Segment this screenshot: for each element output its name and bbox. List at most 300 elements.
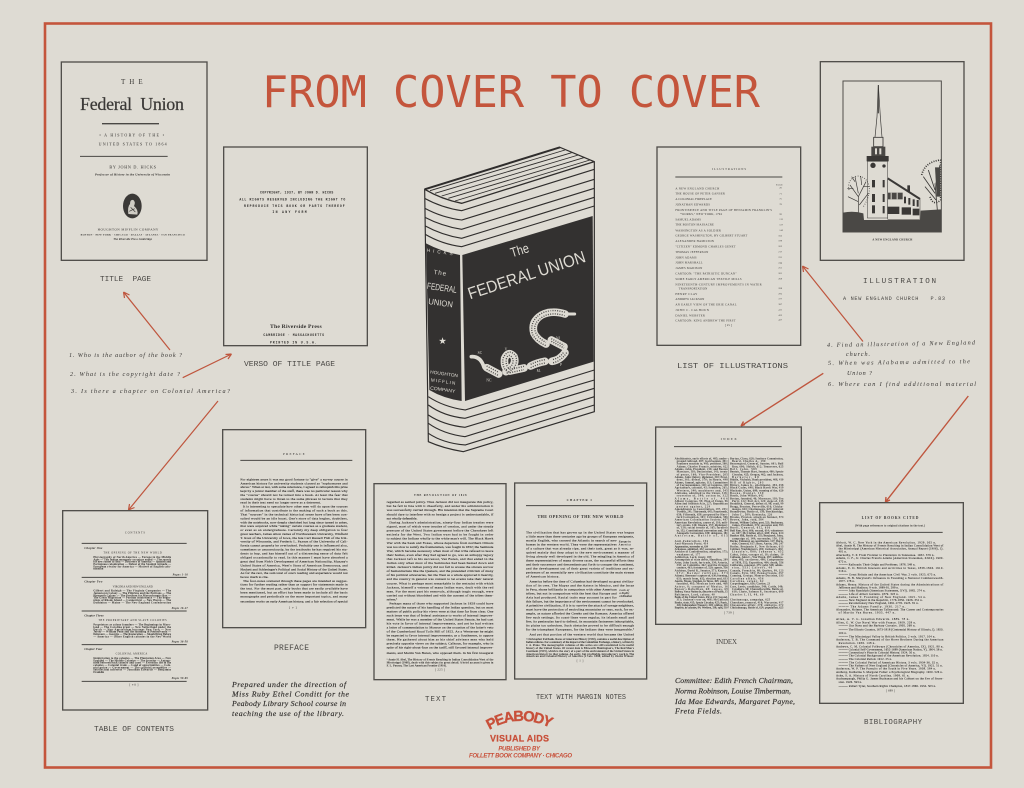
index column two: at, 607; McClellan after, 608; Pope, 614 (732, 532, 784, 535)
questions 4 to 6: 6. Where can I find additional material (828, 381, 976, 388)
preface body text: United States of America, West's Story of American Democracy, and (240, 563, 348, 568)
foot-note (387, 658, 494, 667)
body text: pressure of the United States government before the Cherokees left (387, 529, 493, 533)
index column two: Cabot, John, voyages of, 18; claims, 19 (730, 553, 784, 556)
icon: join or die snake (471, 309, 575, 382)
questions 1 to 3 (69, 352, 231, 395)
index column one: Appomattox, surrender at, 634 (675, 545, 709, 548)
spine panel (426, 243, 462, 401)
body text with side notes: America before the time of Columbus had developed no great civiliza- (529, 579, 635, 583)
index column two: Burke, Edmund, on conciliation, 127; Burn- (730, 540, 783, 543)
panel: title page: HOUGHTON MIFFLIN COMPANY (98, 227, 159, 231)
foot-note: F. L. Paxson, The Last American Frontier (1910). (387, 664, 447, 667)
panel: illustration page (820, 62, 964, 260)
citation list: Anthony, Katharine S. Margaret Fuller: a Psychological Biography. 1920. 526 n. (836, 670, 943, 675)
note: prepared under direction: Miss Ruby Ethel Conditt for the (231, 690, 350, 698)
index column two: Charles I, II, 40, 60 (730, 593, 764, 596)
body text with side notes: and the development out of their great variety of traditions and ex- (526, 566, 635, 570)
list entries: CARTOON: KING ANDREW THE FIRST (675, 319, 736, 323)
preface body text: Hockett and Schlesinger's Political and Social History of the United States. (240, 567, 348, 571)
citation list: Adams, Henry. History of the United States during the Administrations of (836, 582, 943, 587)
index column one: weakness of, 177 (677, 553, 701, 556)
index column two: Bell, John, 589 (730, 468, 757, 471)
arrow: question 4 to illustration list (802, 266, 863, 342)
panel: text with margin notes: CHAPTER I (567, 498, 592, 502)
publisher imprint: Peabody Visual Aids (469, 710, 572, 759)
index column one: 572; Border ruffians, 573 (677, 572, 728, 575)
index column one: of Correspondence, 120; at Congress, 128 (677, 484, 728, 487)
preface body text: As for the rest, the sum total of one's reading and experience would not (240, 571, 348, 576)
label: title page: TITLE PAGE (100, 276, 152, 284)
body text with side notes: America (618, 543, 631, 546)
panel: index: INDEX (721, 437, 737, 441)
spine title: UNION (428, 296, 454, 309)
panel: illustration page: A NEW ENGLAND CHURCH (872, 238, 913, 241)
foot-note: American and Colonial History of America (2 vols. 1888, edited by Justin Winsor. (526, 655, 634, 658)
panel: index: [ 739 ] (724, 611, 734, 615)
body text: War, which became necessary when most of that tribe refused to leave (387, 549, 494, 554)
preface body text: sometimes or unconsciously, by the textbooks he has required his stu- (240, 548, 348, 553)
index column one: 426; Independent Treasury, 428; wildcat, 416 (677, 604, 728, 607)
citation list: ——— Railroads: Their Origin and Problems. 1878. 548 n. (838, 563, 916, 567)
index column two: Bunker Hill, Battle of, 135; Burgoyne, John, (730, 535, 784, 538)
index column two: Party, 122; Port Act, 124; siege of, 135 (732, 500, 784, 503)
spine title: HOUGHTON (430, 369, 458, 378)
body text: be expected to favor internal improvements; as a Southerner, to oppose (387, 634, 494, 639)
panel: verso of title page: COPYRIGHT, 1937, BY JOHN D. HICKS (260, 191, 333, 195)
index column two: Blockade, Union, 608; running of the, 620 (730, 489, 784, 492)
citation list: Adams, C. F., Jr. Charles Francis Adams (American Statesmen, XXIX). 1900. (836, 556, 944, 561)
preface body text: great teachers, James Alton James of Northwestern University, Winfield (240, 532, 348, 537)
icon: join or die snake: SC (478, 351, 483, 355)
panel: title page: BY JOHN D. HICKS (109, 165, 157, 170)
body text with side notes: ample, as nature afforded the Greeks and the Romans. America offered (526, 611, 634, 616)
index column two: side, General, 617; Burr, Aaron, 240, 247 (732, 543, 784, 546)
index column two: Carpetbaggers, 656; Cartier, 23 (730, 583, 771, 586)
note: prepared under direction: Prepared under the direction of (231, 680, 348, 689)
label: illustration: ILLUSTRATION (863, 278, 936, 286)
index column two: Black Codes, 648; Black Hawk War, 419 (730, 487, 784, 490)
list entries: 163 (778, 234, 783, 237)
foot-note: J. A. Fiske. The monographic volumes of this series are still considered to be useful (526, 644, 634, 647)
body text: predicted the nature of his handling of the Indian question, but on most (387, 605, 493, 610)
book title heading: Federal Union (80, 94, 184, 114)
citation list: ——— The Illinois Country, 1673-1818 (Centennial History of Illinois, I). 1920. (838, 627, 944, 632)
panel: list of illustrations (657, 147, 801, 345)
chapter two: nings of Rhode Island — Connecticut — New Haven — The (93, 599, 172, 602)
citation list: Allen, A. V. G. Jonathan Edwards. 1889. 78 n. (836, 617, 910, 622)
body text: but he fell in line with it cheerfully, and under his administration it (387, 504, 493, 509)
preface body text: That "sources" in the technical historical sense have often been con- (240, 512, 348, 516)
list entries: 244 (778, 261, 783, 264)
citation list: ——— Revolutionary New England, 1691-1776. 1923. 81 n. (838, 601, 919, 606)
panel: verso of title page: PRINTED IN U.S.A. (270, 340, 317, 344)
citation list: Ashe, S. A. History of North Carolina. 1908. 61 n. (836, 673, 910, 678)
list entries: THOMAS JEFFERSON (675, 250, 709, 254)
chapter one: nization (93, 568, 104, 571)
citation list: 672 n. (839, 559, 847, 563)
index column one: Alamo, Battle of, 466 (675, 497, 728, 500)
panel: verso of title page: The Riverside Press (270, 324, 322, 330)
index column one: Massacre, 118; Declaration, 141; treaty (677, 471, 728, 474)
list entries: 423 (778, 314, 783, 317)
citation list (836, 540, 944, 689)
index column one: Anti-Federalists, 196 (675, 540, 709, 543)
preface body text: fornia cannot properly be overlooked. Probably one is influenced also, (240, 544, 348, 549)
panel: verso of title page: CAMBRIDGE · MASSACHUSETTS (263, 333, 324, 337)
index column one: Western, 340; machinery and, 545 (677, 489, 728, 492)
chapter two: Jamestown Colony — The Pilgrims and the Puritans — The (93, 592, 172, 595)
page stripes (425, 169, 594, 445)
list entries: 261 (778, 272, 783, 275)
index column two: Brown, John, raid, 584 (730, 519, 764, 522)
index column one: Banks, state, 415; Specie Circular, 425; Panic, (675, 601, 728, 604)
index column two: Cabinet, Washington's, 204; Jackson's, 402; (730, 548, 783, 551)
panel: title page: BOSTON · NEW YORK · CHICAGO · DALLAS · ATLANTA · SAN FRANCISCO (81, 233, 185, 236)
body text: course. What is perhaps most remarkable is the restraint with which (387, 581, 494, 585)
index column two: Chickamauga, Battle of, 624; population, 625 (730, 607, 784, 610)
chapter one: THE OPENING OF THE NEW WORLD (103, 552, 162, 555)
panel: table of contents: CONTENTS (125, 530, 145, 534)
index column two: Brooks, Preston, attack on Sumner, 574 (730, 516, 784, 519)
index column one: dent, 361; defeat, 370; in House, 498 (677, 479, 728, 482)
list entries: 113 (779, 218, 784, 221)
chapter four: Pages 59-69 (172, 677, 188, 680)
body text with side notes: quired mainly that they adapt to the new environment a manner of (526, 551, 635, 555)
note: prepared under direction (231, 680, 350, 718)
label: text with margin notes: TEXT WITH MARGIN NOTES (536, 694, 627, 702)
index column two: Benton, Thomas Hart, Senator, 400; Specie (730, 471, 784, 474)
index column two: Boston, founded, 46; Massacre, 118; Tea (730, 497, 784, 500)
foot-note: Continent (1919), which is the story of a part of the environment of the United States in (526, 650, 634, 653)
chapter four: colonies — Colonial trade — Land of opportunities — Cole- (93, 664, 171, 667)
chapter four: Franklin (93, 671, 104, 674)
arrow: question 3 to contents (128, 401, 218, 510)
panel: title page: • A HISTORY OF THE • (99, 133, 165, 138)
index column two: Berkeley, 68 (732, 476, 759, 479)
chapter two: Chapter Two (84, 580, 103, 584)
citation list: ——— New England in the Republic, 1776-1850. 1926. 351 n. (838, 598, 923, 603)
label: table of contents: TABLE OF CONTENTS (94, 726, 175, 734)
list entries: [ xv ] (725, 323, 732, 327)
citation list: ——— The Colonial Period. 1912. 25 n. (838, 657, 892, 661)
preface body text: monographs and periodicals on the more important topics, and many (240, 595, 348, 600)
index column two: Braddock, General, defeat of, 98; road, 99 (730, 503, 784, 506)
index column two: Bryant, William Cullen, poet, 521; Buchanan, (730, 521, 784, 524)
preface body text: or even as an undergraduate. Certainly my deep obligation to four (240, 528, 348, 532)
questions 4 to 6: 5. When was Alabama admitted to the (828, 358, 970, 367)
spine title: HICKS (427, 248, 453, 256)
chapter two: Plymouth Colony — The Pressure for Massachusetts Bay — (93, 594, 171, 597)
index column one: Bacon's Rebellion, 68; causes, 69 (675, 588, 728, 591)
body text: During Jackson's administration, ninety-four Indian treaties were (389, 521, 494, 526)
citation list: ——— Life of Albert Gallatin. 1879. 323 n. (838, 592, 899, 596)
preface body text: dents to buy, and has himself out of a distressing sense of duty felt (240, 552, 348, 557)
note: committee: Ida Mae Edwards, Margaret Payne, (674, 697, 795, 706)
panel: bibliography: (With page references to original citations in the text.) (855, 524, 925, 527)
panel: verso of title page: REPRODUCE THIS BOOK OR PARTS THEREOF (244, 204, 345, 208)
foot-note: Mississippi (1908), deals with this subject in great detail. A brief account is given in (387, 661, 494, 664)
index column two: Chattanooga, campaign, 625 (730, 599, 771, 602)
body text with side notes: few such settings. Its coast-lines were regular, its islands small and (526, 615, 634, 620)
body text with side notes: mostly English, who crossed the Atlantic in search of new (526, 539, 617, 544)
chapter two: Dominion — Maine — The New England Confederation (93, 601, 171, 604)
foot-note: ¹ Annie H. Abel, The History of Events Resulting in Indian Consolidation West of the (387, 658, 494, 661)
index column two: Birney, James G., abolitionist, 494, 458 (730, 484, 784, 487)
list entries: DANIEL WEBSTER (675, 313, 705, 317)
note: committee: Committee: Edith French Chairman, (675, 676, 793, 685)
preface body text (240, 477, 348, 605)
chapter three: THE PROPRIETARY AND SLAVE COLONIES (98, 619, 167, 622)
preface body text: obliged occasionally to read. In this manner I must have absorbed a (240, 555, 348, 559)
body text with side notes: for the triumphant Europeans, for the Indians they were insuperable.¹ (526, 627, 634, 632)
index column one: Bank of the United States, First, 211; Second, (675, 596, 728, 599)
index column one: 650; Fifteenth, 658; proposed by Hart- (677, 513, 728, 516)
icon: publisher seal (123, 194, 142, 218)
list entries: 199 (778, 240, 783, 243)
body text: ments, and Martin Van Buren, who opposed them. In his first inaugural (387, 651, 493, 656)
index column one: Atlanta, Sherman's capture of, 630; burning, (675, 575, 728, 578)
chapter four: Intellectual interests — Jonathan Edwards — Benjamin (93, 669, 171, 672)
foot-note: American history in that volume. An early, but profitable, introductory work is The (526, 653, 635, 656)
body text with side notes: must have the protection of encircling mountains or seas, such, for ex- (526, 607, 635, 612)
body text: not wholly defensible. (387, 516, 417, 520)
foot-note (526, 638, 635, 658)
body text with side notes: a little more than three centuries ago by groups of European emigrants, (526, 535, 634, 540)
arrow: question 1 to title page (124, 292, 170, 350)
body text: spite of his right-about-face on the tariff, still favored internal improve- (387, 646, 494, 651)
index column one: Alabama, admitted to the Union, 318; (675, 492, 728, 495)
index column one (675, 457, 729, 610)
citation list: Andrews, C. M. Colonial Folkways (Chronicles of America, IX). 1921. 80 n. (836, 644, 944, 649)
index column two: Run, 606; Shiloh, 612; Tennessee, 625 (732, 465, 784, 468)
body text: to subject the Indians wholly to the white man's will. The Black Hawk (387, 537, 494, 541)
citation list: ——— John Randolph (American Statesmen, XVI). 1882. 274 n. (838, 589, 926, 594)
meeting house (888, 178, 920, 219)
index column one: Assumption of state debts, Hamilton, 209 (675, 559, 728, 562)
index column two: Canals, Erie, 355; Pennsylvania, 357 (730, 572, 784, 575)
icon: join or die snake: V (505, 348, 508, 352)
list entries: JOHN MARSHALL (675, 261, 703, 265)
body text: that Jackson left to his successor, Van Buren, and that ended in the (387, 557, 494, 562)
citation list: ——— The Colonial Period of American History. 3 vols. 1934-36. 32 n. (838, 660, 939, 664)
chapter four: England — The Middle Colonies — The frontier — Antago- (93, 659, 171, 662)
panel: bibliography (820, 503, 963, 703)
panel: text page: THE REVOLUTION OF 1828 (414, 494, 467, 497)
body text: of his political adversaries, but the West as a whole approved it heartily, (387, 573, 493, 578)
index column two: John C., 589; Kentucky, 226 (732, 513, 773, 516)
publisher imprint: Peabody Visual Aids: PUBLISHED BY (498, 746, 541, 752)
index column one: Amendments to Constitution, 197, 203; (675, 508, 728, 511)
questions 4 to 6: church. (846, 351, 870, 358)
preface body text: T. Root of the University of Iowa, the late Carl Russell Fish of the Uni- (240, 536, 348, 541)
spine title (426, 248, 458, 394)
preface body text: the "course" should not be turned into a book. At least the fear that (240, 493, 348, 497)
chapter four: nism between back country and coast — Everyday life in the (93, 662, 172, 665)
list entries: A NEW ENGLAND CHURCH (675, 186, 720, 190)
body text: should dare to interfere with so benign a project is understandable, if (387, 512, 494, 517)
chapter four: COLONIAL AMERICA (116, 652, 147, 655)
list entries: 437 (778, 318, 783, 321)
panel: text with margin notes: THE OPENING OF THE NEW WORLD (537, 514, 623, 519)
right tree (923, 165, 940, 210)
citation list: ——— Robert Tyler, Southern Rights Champion, 1847-1866. 1934. 503 n. (838, 684, 936, 689)
preface body text: the text. For the most part, only books that are easily available have (240, 587, 348, 592)
chapter one: Chapter One (84, 546, 103, 550)
index column one: Adams, Charles Francis, minister, 622 (677, 465, 728, 468)
tower (867, 161, 888, 218)
index column two: Cass, Lewis, candidate, 548; Cattle, 340; (730, 585, 783, 588)
index column one: Southern reaction to, 495; petitions, 500; (677, 463, 728, 466)
index column two: Cherokees, removal, 418; Worcester, 417 (730, 601, 784, 604)
chapter one: Physiography of North America — Europe in the Middle (93, 556, 172, 559)
index column two: Chesapeake affair, 270; embargo, 272 (730, 604, 784, 607)
list entries: 411 (778, 309, 783, 312)
preface body text: American history for university students classed as "sophomores and (240, 481, 348, 485)
list entries: 71 (779, 192, 783, 195)
index column two: Booth, John Wilkes, 642 (730, 495, 764, 498)
panel: verso of title page: ALL RIGHTS RESERVED INCLUDING THE RIGHT TO (239, 197, 345, 201)
index column one: Austin, Moses, Stephen, in Texas, 465; colony (675, 580, 728, 583)
body text with side notes: periences of an essentially new civilization constitute the main stream (526, 570, 634, 574)
index column one: Arkansas, admitted, 432; secession, 603 (675, 548, 722, 551)
chapter one: European rivalry for America — Motives of English colo- (93, 565, 171, 568)
panel: text page: [ 225 ] (435, 668, 445, 672)
list entries: 75 (779, 198, 783, 201)
preface body text: tions for further reading rather than as support for statements made in (240, 583, 348, 587)
index column one: Annapolis Convention, 180; delegates, 181 (677, 532, 728, 535)
index column two: of 1850, 552; Exposition, 404; death, 556 (732, 561, 784, 564)
panel: index (656, 427, 801, 624)
body text: ment. While he was a member of the United States Senate, he had cast (387, 617, 493, 622)
chapter three: Proprietors as colony founders — The Beginnings in Mary- (93, 624, 171, 627)
publisher imprint: Peabody Visual Aids: VISUAL AIDS (490, 733, 549, 743)
panel: bibliography: [ 689 ] (886, 689, 895, 693)
preface body text: above." When at last, with some reluctance, I agreed to relinquish this prize (240, 485, 348, 490)
body text: Perhaps many of those who supported Jackson in 1828 could have (389, 601, 494, 605)
chapter four: Immigration to the colonies — The Plantation Area — New (93, 657, 171, 660)
index column two: Beard, Charles A., 190 (732, 460, 766, 463)
index column two: Brandywine, Battle of, 150; Breckinridge, (730, 511, 784, 514)
index column one: Aztecs, 8; conquest of Mexico, 16 (675, 585, 728, 588)
index column two: 618; Chase, Salmon P., Secretary, 600 (732, 591, 784, 594)
citation list: ——— The Mississippi Valley in British Politics. 2 vols. 1917. 104 n. (838, 634, 936, 638)
list entries: 387 (778, 303, 783, 306)
citation list: sion. 1926. 593 n. (839, 680, 862, 684)
list entries: 217 (778, 251, 783, 254)
list entries: AN EARLY VIEW OF THE ERIE CANAL (675, 302, 737, 306)
body text with side notes: these representatives of many diverse races, the successful efforts they (526, 558, 634, 563)
body text with side notes: and their successors and descendants put forth to conquer the continent, (526, 562, 634, 567)
index column one: Baptists, in colonies, 84; Western, 338; split, 510 (675, 607, 728, 610)
preface body text: The foot-notes scattered through these pages are intended as sugges- (243, 579, 348, 583)
list entries: "CITIZEN" EDMOND CHARLES GENET (675, 244, 736, 248)
body text with side notes: homes in the western world. They were the representatives (526, 543, 617, 547)
chapter four: Chapter Four (84, 647, 103, 651)
cover title: FEDERAL UNION (465, 247, 588, 303)
index column one: Alien and Sedition Acts, 227; Republican (675, 503, 728, 506)
citation list: Revolution. 1936. 148 n. (839, 641, 876, 645)
citation list: ——— Colonial Self-Government, 1652-1689 (American Nation, V). 1904. 58 n. (838, 647, 943, 652)
label: index: INDEX (716, 638, 737, 646)
body text: regarded as settled policy. Thus Jackson did not inaugurate this policy, (387, 500, 493, 505)
body text with side notes: of American history. (526, 574, 559, 578)
list entries: JOHN C. CALHOUN (675, 308, 710, 312)
index column one: tary events, 146; finance, 157; diplomacy (677, 524, 728, 527)
index column one: 311; Jackson's war on, 408; McCulloch (677, 599, 728, 602)
index column two: Bill of Rights, 203 (730, 481, 764, 484)
chapter three (84, 613, 188, 644)
body text: War with the Sauk and Foxes, whose departure from northern Illinois (387, 541, 494, 546)
body text (387, 500, 494, 656)
questions 4 to 6 (827, 339, 976, 388)
list entries: 20 (779, 187, 783, 190)
index column two: Lincoln's, 600; Johnson's, 652 (732, 551, 784, 554)
panel: table of contents: [ vii ] (129, 683, 138, 687)
spine title: The (433, 269, 447, 278)
body text: Indian only when most of the Seminoles had been hunted down and (387, 561, 494, 565)
panel: text with margin notes: [ 1 ] (577, 659, 583, 663)
index column two: Canning, George, Monroe Doctrine, 333 (730, 575, 784, 578)
citation list: Jefferson and Madison. 9 vols. 1889-91. 289 n. (839, 585, 899, 589)
body text: of the Cumberland Road Toils Bill of 1822. As a Westerner he might (387, 630, 493, 634)
body text: his vote in favor of internal improvements, and yet he had written (387, 622, 494, 627)
body text: such issue was that of federal assistance to works of internal improve- (387, 613, 494, 617)
publisher imprint: Peabody Visual Aids: FOLLETT BOOK COMPANY · CHICAGO (469, 753, 572, 759)
index column one: Articles of Confederation, adoption, 175; (675, 551, 728, 554)
arrow: question 2 to verso (183, 354, 232, 378)
index column one: of, 158; social results of, 165; loyalists (677, 527, 729, 530)
cover title: The (508, 240, 531, 260)
citation list: ——— Great Britain and the American Civil War. 2 vols. 1925. 675 n. (838, 573, 936, 577)
body text with side notes: few, its peninsulas hard to defend, its mountain fastnesses inhospitable, (526, 619, 634, 624)
body text: carried out without bloodshed and with the consent of the tribes them- (387, 593, 494, 597)
index column one: Ashburton, Lord, treaty, 459 (675, 556, 712, 559)
foot-note: ¹ Christopher Fairbank. Races of American History (1930), contains a useful description of (526, 638, 634, 641)
list entries: 78 (779, 203, 783, 206)
list entries: PAGE (776, 184, 783, 187)
title: FROM COVER TO COVER (262, 68, 761, 118)
body text: killed. Jackson's Indian policy did not fail to arouse the sincere sorrow (387, 565, 494, 569)
citation list: the Mississippi (American Historical Association, Annual Report (1906), 1). (839, 547, 944, 552)
spine title: COMPANY (430, 385, 456, 394)
index column two: mauga, 624; Chattanooga, 625; removal (732, 508, 784, 511)
list entries: 231 (778, 256, 783, 259)
label: list of illustrations: LIST OF ILLUSTRATIONS (677, 363, 789, 371)
index column two: Circular, 425; Oregon, 462; and Jackson, (732, 473, 784, 476)
book illustration (425, 147, 594, 452)
preface body text: read in their text need no longer serve as a deterrent. (240, 501, 321, 505)
body text with side notes: living already well developed in the old. The mingling in America of (526, 554, 635, 558)
chapter four: nial union — Government — The colonial assemblies — (93, 666, 171, 669)
body text: precisely opposite views on the subject; Calhoun, for example, who in (387, 642, 494, 647)
chapter one: Portuguese colonization — Defeat of the Spanish Armada — (93, 563, 171, 566)
list entries: WASHINGTON AS A SOLDIER (675, 228, 721, 232)
icon: join or die snake: NJ (556, 336, 561, 340)
foot-note: history of the United States. Of recent date is Ellsworth Huntington's, The Red Man's (526, 647, 635, 650)
chapter two: The Great Migration — Puritan intolerance — The begin- (93, 597, 171, 600)
index column one: Abolitionists, early efforts of, 485; under- (675, 457, 728, 460)
body text: selves.¹ (387, 597, 397, 601)
chapter two: VIRGINIA AND NEW ENGLAND (113, 586, 153, 589)
left tree (847, 176, 869, 213)
publisher imprint: Peabody Visual Aids: PEABODY (485, 710, 554, 730)
index column one: country, 463; fortunes of, 520; agents, 336 (677, 567, 728, 570)
chapter three: Chapter Three (84, 613, 104, 617)
citation list: ——— Connecticut's Place in Colonial History. 1924. 50 n. (838, 650, 916, 654)
list entries: 269 (778, 277, 783, 280)
index column one: in, 152; Constitutional convention and, 184 (677, 529, 728, 532)
